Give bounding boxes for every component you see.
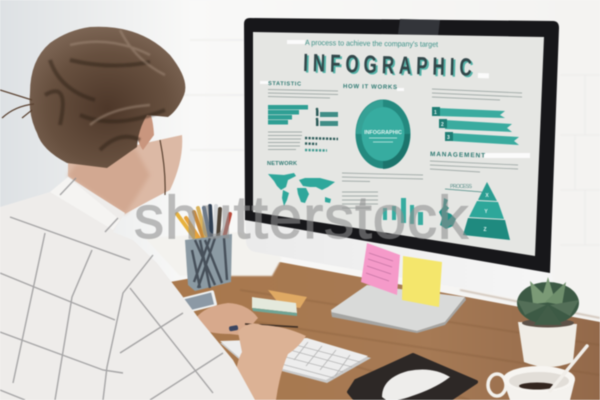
sticky note stack xyxy=(252,290,307,316)
panel: network xyxy=(267,161,335,206)
woman: hair bun xyxy=(0,27,185,195)
ribbon 3: 3 xyxy=(447,135,450,141)
ribbon 2: 2 xyxy=(441,122,444,128)
monitor chin xyxy=(245,215,558,305)
horizontal bar chart xyxy=(268,105,308,124)
sticky note: yellow xyxy=(402,256,442,307)
center paragraph xyxy=(342,173,423,182)
pyramid xyxy=(463,182,510,240)
sticky note: pink xyxy=(361,243,400,295)
subtitle: A process to achieve the company's target xyxy=(305,38,439,49)
tree icon xyxy=(439,198,456,229)
white highlight bars xyxy=(260,40,530,158)
panel: process xyxy=(439,182,510,240)
heading: network: NETWORK xyxy=(267,161,297,167)
pencils xyxy=(177,206,230,240)
heading: statistic: STATISTIC xyxy=(268,81,301,88)
ribbon intro text xyxy=(432,89,522,100)
spoon xyxy=(550,346,587,391)
circle diagram xyxy=(356,100,410,169)
people stat icons xyxy=(316,108,338,126)
wooden desk xyxy=(170,262,600,400)
mouse xyxy=(382,369,450,400)
bezel reflection xyxy=(398,19,440,36)
main title INFOGRAPHIC: INFOGRAPHIC xyxy=(303,49,477,82)
hair wisps xyxy=(0,90,165,195)
woman: plaid shirt xyxy=(0,177,255,400)
column chart xyxy=(383,198,423,225)
pencil cup with pencils xyxy=(177,206,232,291)
heading: management: MANAGEMENT xyxy=(430,151,485,159)
heading: process: PROCESS xyxy=(450,184,473,190)
statistic side text xyxy=(268,132,302,150)
potted succulent xyxy=(517,277,579,367)
woman: neck and face xyxy=(68,105,182,214)
cup xyxy=(185,234,232,291)
management paragraph xyxy=(430,161,518,172)
monitor xyxy=(244,18,559,305)
papers behind pencil cup xyxy=(145,232,282,276)
circle label: INFOGRAPHIC xyxy=(364,130,402,136)
coffee cup with spoon xyxy=(488,346,587,400)
right hand and arm xyxy=(236,324,306,400)
mouse pad xyxy=(349,355,476,398)
pyramid: Z xyxy=(483,227,487,233)
collar shading xyxy=(50,177,120,230)
heading: how it works: HOW IT WORKS xyxy=(343,84,397,91)
ribbon 1: 1 xyxy=(434,110,437,116)
cup body xyxy=(503,380,575,400)
panel: how it works xyxy=(342,84,423,225)
screen xyxy=(253,32,544,256)
dot rows xyxy=(305,138,338,150)
world map xyxy=(268,173,335,206)
tablet on desk xyxy=(180,290,217,314)
keyboard xyxy=(220,338,371,383)
pyramid: Y xyxy=(484,209,488,215)
panel: ribbons xyxy=(432,89,522,145)
pen xyxy=(245,324,298,327)
pot xyxy=(518,322,577,367)
statistic paragraph xyxy=(268,90,338,98)
watermark: shutterstock xyxy=(134,184,469,251)
pyramid: X xyxy=(485,193,489,199)
monitor stand base xyxy=(331,285,466,333)
left hand xyxy=(196,303,258,336)
panel: management xyxy=(430,151,518,172)
succulent leaves xyxy=(517,277,579,325)
monitor black bezel xyxy=(244,18,559,273)
panel: statistic xyxy=(268,81,338,150)
cup handle xyxy=(488,374,506,396)
plaid lines xyxy=(0,178,223,400)
lower paragraph xyxy=(342,192,378,208)
main title INFOGRAPHIC: INFOGRAPHIC xyxy=(305,50,479,83)
hands xyxy=(196,303,306,400)
